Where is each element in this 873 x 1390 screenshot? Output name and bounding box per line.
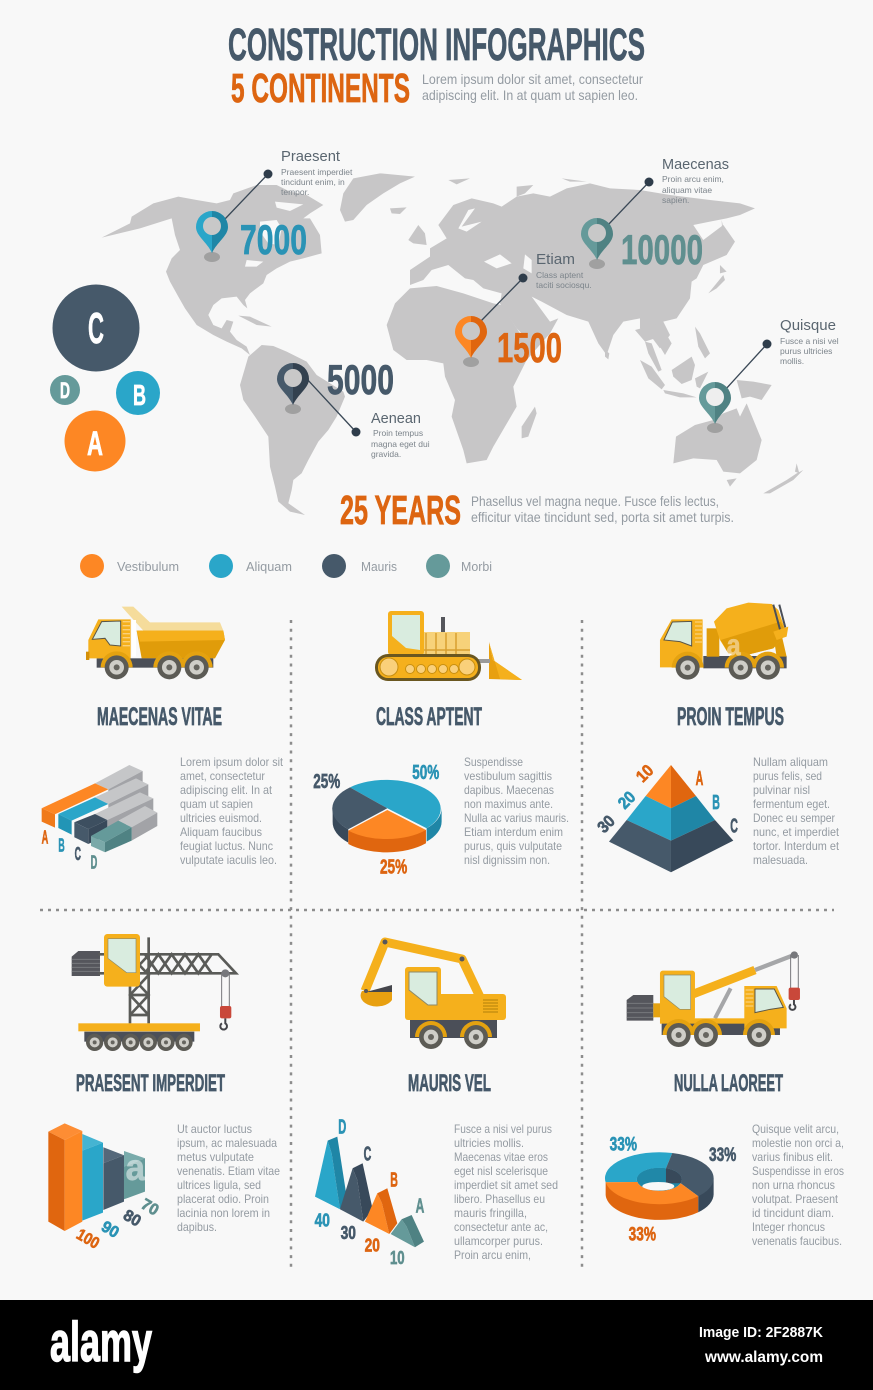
legend: Vestibulum <box>117 559 179 574</box>
text block 2: Suspendisse <box>464 755 523 769</box>
mountain labels: C <box>364 1143 371 1166</box>
icon: cement mixer truck: a <box>727 629 741 662</box>
footer bar <box>0 1300 873 1390</box>
text block 2: non maximus ante. <box>464 797 553 811</box>
intro text <box>422 71 643 103</box>
footer image id: Image ID: 2F2887K <box>699 1324 823 1341</box>
text block 1: amet, consectetur <box>180 769 265 783</box>
label: Aenean: Aenean <box>371 410 421 427</box>
intro text: Lorem ipsum dolor sit amet, consectetur <box>422 71 643 87</box>
pyramid labels: A <box>696 767 703 790</box>
bar labels: 70 <box>138 1196 161 1219</box>
text block 3: purus felis, sed <box>753 769 822 783</box>
bubble A <box>64 410 126 472</box>
text block 3: nunc, et imperdiet <box>753 825 840 839</box>
text block 4: ultrices ligula, sed <box>177 1178 261 1192</box>
chart labels A B C D <box>42 826 97 873</box>
mountain labels: A <box>416 1195 424 1218</box>
label: Aenean <box>371 410 430 459</box>
bar labels: 80 <box>120 1207 144 1230</box>
value 5000: 5000 <box>327 356 394 403</box>
text block 2: vestibulum sagittis <box>464 769 552 783</box>
label: Quisque <box>780 317 839 366</box>
text block 3: Nullam aliquam <box>753 755 828 769</box>
heading: Proin Tempus: PROIN TEMPUS <box>677 703 784 731</box>
label: Quisque: Fusce a nisi vel <box>780 336 839 346</box>
mountain labels: D <box>338 1115 346 1138</box>
text block 5: libero. Phasellus eu <box>454 1192 545 1206</box>
value 7000: 7000 <box>240 216 307 263</box>
text block 5 <box>454 1122 558 1262</box>
label: Etiam <box>536 251 592 290</box>
donut labels: 33% <box>629 1224 656 1245</box>
legend <box>80 554 492 578</box>
text block 2 <box>464 755 569 867</box>
chart: mountain triangles <box>315 1115 424 1268</box>
text block 1: feugiat luctus. Nunc <box>180 839 273 853</box>
label: Aenean: Proin tempus <box>373 428 423 438</box>
25 years text: efficitur vitae tincidunt sed, porta sit amet turpis. <box>471 509 734 525</box>
text block 4: metus vulputate <box>177 1150 254 1164</box>
pyramid labels: 30 <box>593 811 619 837</box>
text block 4: Ut auctor luctus <box>177 1122 252 1136</box>
bar labels <box>73 1196 161 1253</box>
text block 2: Nulla ac varius mauris. <box>464 811 569 825</box>
text block 6: venenatis faucibus. <box>752 1234 842 1248</box>
chart labels A B C D: A <box>42 826 48 847</box>
text block 5: Maecenas vitae eros <box>454 1150 548 1164</box>
text block 4: lacinia non lorem in <box>177 1206 270 1220</box>
text block 4: placerat odio. Proin <box>177 1192 269 1206</box>
label: Maecenas: Proin arcu enim, <box>662 174 724 184</box>
text block 1: adipiscing elit. In at <box>180 783 273 797</box>
legend: Mauris <box>361 559 397 574</box>
25 years heading: 25 YEARS <box>340 487 461 533</box>
label: Aenean: gravida. <box>371 449 401 459</box>
text block 2: nisl dignissim non. <box>464 853 550 867</box>
text block 6: non urna rhoncus <box>752 1178 835 1192</box>
bubble B <box>116 371 160 415</box>
chart labels A B C D: B <box>58 835 65 856</box>
text block 1 <box>180 755 284 867</box>
pin: Quisque <box>699 340 772 433</box>
25 years text <box>471 493 734 525</box>
icon: tower crane <box>72 934 236 1051</box>
text block 2: purus, quis vulputate <box>464 839 562 853</box>
text block 5: Proin arcu enim, <box>454 1248 531 1262</box>
text block 1: quam ut sapien <box>180 797 253 811</box>
chart: 3D donut <box>605 1134 736 1245</box>
label: Quisque: Quisque <box>780 317 836 334</box>
pyramid labels <box>593 761 738 837</box>
text block 5: mauris fringilla, <box>454 1206 527 1220</box>
subtitle: 5 continents: 5 CONTINENTS <box>231 65 410 111</box>
text block 3: pulvinar nisl <box>753 783 810 797</box>
category bubbles <box>50 284 160 472</box>
pyramid labels: C <box>730 814 738 837</box>
text block 5: ullamcorper purus. <box>454 1234 543 1248</box>
text block 5: imperdiet sit amet sed <box>454 1178 558 1192</box>
heading: Praesent Imperdiet: PRAESENT IMPERDIET <box>76 1070 225 1097</box>
label: Etiam: taciti sociosqu. <box>536 280 592 290</box>
label: Praesent: tincidunt enim, in <box>281 177 345 187</box>
label: Quisque: mollis. <box>780 356 804 366</box>
pyramid labels: 20 <box>614 787 639 813</box>
text block 6: Integer rhoncus <box>752 1220 825 1234</box>
icon: mobile crane truck <box>627 951 800 1047</box>
text block 6: molestie non orci a, <box>752 1136 844 1150</box>
bubble letters: D <box>60 378 70 403</box>
text block 5: consectetur ante ac, <box>454 1220 548 1234</box>
text block 1: vulputate iaculis leo. <box>180 853 277 867</box>
mountain labels: 20 <box>365 1235 380 1256</box>
label: Etiam: Etiam <box>536 251 575 268</box>
text block 6: volutpat. Praesent <box>752 1192 839 1206</box>
text block 3: fermentum eget. <box>753 797 830 811</box>
donut labels <box>610 1134 736 1245</box>
label: Maecenas: sapien. <box>662 195 689 205</box>
label: Maecenas <box>662 156 729 205</box>
text block 3: malesuada. <box>753 853 808 867</box>
25 years text: Phasellus vel magna neque. Fusce felis lectus, <box>471 493 719 509</box>
pie labels <box>313 762 439 878</box>
text block 3: Donec eu semper <box>753 811 835 825</box>
mountain labels: 40 <box>315 1210 330 1231</box>
value 10000: 10000 <box>621 226 703 273</box>
bubble letters: A <box>87 425 103 463</box>
text block 6: id tincidunt diam. <box>752 1206 834 1220</box>
label: Etiam: Class aptent <box>536 270 584 280</box>
heading: Mauris Vel: MAURIS VEL <box>408 1070 491 1097</box>
pin: Etiam <box>455 274 528 367</box>
footer url: www.alamy.com <box>704 1349 823 1366</box>
label: Aenean: magna eget dui <box>371 439 430 449</box>
world map <box>102 173 803 515</box>
bubble C <box>52 284 140 372</box>
footer logo: alamy <box>50 1310 152 1373</box>
label: Praesent: Praesent <box>281 148 341 165</box>
text block 4 <box>177 1122 280 1234</box>
pie labels: 50% <box>412 762 439 784</box>
legend: Aliquam <box>246 559 292 574</box>
pin: Praesent <box>196 170 272 262</box>
pie labels: 25% <box>313 771 340 793</box>
label: Praesent: tempor. <box>281 187 309 197</box>
icon: excavator <box>361 940 506 1049</box>
text block 5: Fusce a nisi vel purus <box>454 1122 552 1136</box>
pyramid labels: 10 <box>632 761 657 786</box>
pin: Aenean <box>277 363 360 436</box>
heading: Maecenas Vitae: MAECENAS VITAE <box>97 703 222 731</box>
icon: bulldozer <box>375 611 522 681</box>
icon: cement mixer truck <box>660 603 788 680</box>
heading: Class Aptent: CLASS APTENT <box>376 703 482 731</box>
label: Quisque: purus ultricies <box>780 346 832 356</box>
text block 1: Aliquam faucibus <box>180 825 262 839</box>
chart: isometric stacked bars <box>42 765 157 873</box>
chart: 3D bars: a <box>126 1147 146 1188</box>
heading: Nulla Laoreet: NULLA LAOREET <box>674 1070 783 1097</box>
label: Praesent: Praesent imperdiet <box>281 167 353 177</box>
text block 4: dapibus. <box>177 1220 217 1234</box>
intro text: adipiscing elit. In at quam ut sapien leo. <box>422 87 638 103</box>
pie labels: 25% <box>380 856 407 878</box>
text block 3 <box>753 755 840 867</box>
chart: isometric stacked bars: D <box>91 852 97 873</box>
label: Maecenas: Maecenas <box>662 156 729 173</box>
label: Praesent <box>281 148 353 197</box>
text block 2: dapibus. Maecenas <box>464 783 554 797</box>
chart labels A B C D: C <box>75 843 81 864</box>
text block 5: eget nisl scelerisque <box>454 1164 548 1178</box>
text block 1: Lorem ipsum dolor sit <box>180 755 284 769</box>
donut labels: 33% <box>610 1134 637 1155</box>
chart: 3D bars <box>48 1123 161 1253</box>
text block 2: Etiam interdum enim <box>464 825 563 839</box>
text block 3: tortor. Interdum et <box>753 839 840 853</box>
bubble letters: C <box>88 304 104 353</box>
text block 6 <box>752 1122 844 1248</box>
text block 6: Suspendisse in eros <box>752 1164 844 1178</box>
bubble letters: B <box>133 380 146 412</box>
text block 4: venenatis. Etiam vitae <box>177 1164 280 1178</box>
bubble letters <box>60 304 146 463</box>
chart: pyramid <box>593 761 738 872</box>
text block 6: varius finibus elit. <box>752 1150 833 1164</box>
text block 4: ipsum, ac malesuada <box>177 1136 277 1150</box>
text block 6: Quisque velit arcu, <box>752 1122 839 1136</box>
text block 1: ultricies euismod. <box>180 811 262 825</box>
mountain labels: 30 <box>341 1222 356 1243</box>
chart: exploded 3D pie <box>313 762 442 878</box>
label: Maecenas: aliquam vitae <box>662 185 712 195</box>
bar labels: 90 <box>98 1218 122 1242</box>
bar labels: 100 <box>73 1226 102 1253</box>
bubble D <box>50 375 80 405</box>
icon: dump truck <box>86 607 225 679</box>
mountain labels: B <box>390 1169 398 1192</box>
mountain labels: 10 <box>390 1247 405 1268</box>
value 1500: 1500 <box>497 324 562 371</box>
pyramid labels: B <box>712 791 720 814</box>
legend: Morbi <box>461 559 492 574</box>
text block 5: ultricies mollis. <box>454 1136 524 1150</box>
pin: Maecenas <box>581 178 654 269</box>
mountain labels <box>315 1115 424 1268</box>
donut labels: 33% <box>709 1145 736 1166</box>
